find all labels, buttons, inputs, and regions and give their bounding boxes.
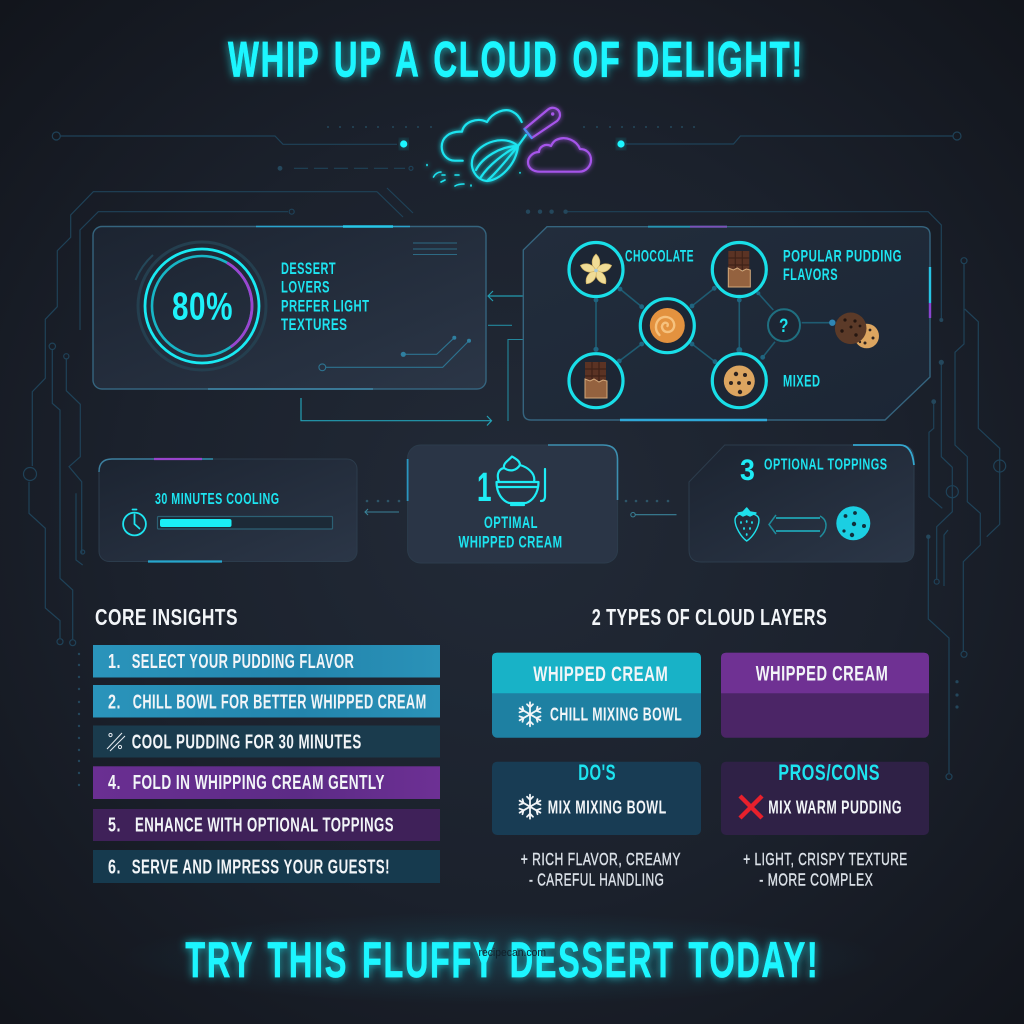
icon: cyan cookie: [836, 506, 870, 540]
step 4: FOLD IN WHIPPING CREAM GENTLY: [133, 772, 385, 794]
decorative dots: [78, 126, 959, 786]
icon: stopwatch: [123, 510, 146, 535]
step 2: 2.: [108, 691, 121, 713]
label: popular pudding flavors: FLAVORS: [783, 266, 838, 284]
step 5: ENHANCE WITH OPTIONAL TOPPINGS: [135, 815, 394, 837]
unknown flavor node: [768, 309, 800, 341]
whisk handle: [524, 108, 560, 138]
label: popular pudding flavors: [783, 248, 902, 284]
description: [281, 259, 370, 334]
list: cream pros and cons: + RICH FLAVOR, CREAMY: [521, 849, 681, 869]
card: whipped cream cyan: [492, 653, 701, 738]
panel: popular pudding flavors: [523, 227, 930, 420]
label: OPTIMAL: [484, 514, 538, 532]
progress ring: [136, 242, 266, 370]
swirl node centre: [640, 299, 694, 353]
circuit traces: left: [24, 132, 413, 646]
chocolate node top: [712, 242, 766, 296]
step 3: COOL PUDDING FOR 30 MINUTES: [132, 731, 362, 753]
panel: 80 percent stat: [93, 226, 486, 389]
cyan cloud: [442, 110, 522, 161]
step 6: 6.: [108, 856, 121, 878]
card: whipped cream cyan: WHIPPED CREAM: [533, 663, 668, 686]
icon: exchange arrows: [769, 515, 826, 537]
card: pros and cons: PROS/CONS: [778, 760, 880, 785]
description: DESSERT: [281, 259, 336, 278]
icon: whipped cream bowl: [496, 456, 545, 505]
label: mixed: MIXED: [783, 373, 820, 391]
icon: snowflake: [520, 795, 540, 819]
card: do's: MIX MIXING BOWL: [548, 797, 667, 817]
unknown flavor node: ?: [779, 316, 789, 337]
label: [458, 514, 562, 552]
step 1: [93, 645, 440, 678]
glowing node left: [400, 140, 407, 148]
arrow and dots: cream to toppings: [625, 500, 676, 517]
list: core insights: [93, 645, 440, 883]
crumbs: [427, 164, 520, 186]
arrow: between top panels: [488, 291, 562, 301]
panel: cooling time: [99, 459, 357, 562]
heading: cloud layers: 2 TYPES OF CLOUD LAYERS: [592, 604, 827, 630]
step 1: 1.: [108, 651, 121, 673]
step 2: [93, 685, 440, 718]
list: cloud pros and cons: + LIGHT, CRISPY TEXTURE: [743, 849, 908, 869]
watermark: recipecan.com: [478, 947, 546, 959]
label: chocolate: CHOCOLATE: [625, 248, 694, 266]
network connectors: [596, 288, 832, 362]
step 2: CHILL BOWL FOR BETTER WHIPPED CREAM: [133, 691, 427, 713]
step 3: [93, 726, 440, 758]
purple cloud: [528, 138, 591, 172]
label: 30 MINUTES COOLING: [155, 491, 280, 508]
step 5: [93, 809, 440, 841]
list: cloud pros and cons: [743, 849, 908, 889]
card: pros and cons: [721, 760, 929, 835]
cookie node: [712, 354, 766, 408]
icon: strawberry: [735, 508, 759, 541]
step 6: SERVE AND IMPRESS YOUR GUESTS!: [132, 856, 390, 878]
label: popular pudding flavors: POPULAR PUDDING: [783, 248, 902, 266]
glowing node right: [617, 140, 625, 148]
network nodes: [593, 286, 836, 364]
step 4: 4.: [108, 772, 121, 794]
arrow and dots: cooling to cream: [365, 500, 400, 515]
step 6: [93, 850, 440, 883]
number: 1: [477, 464, 492, 510]
step 4: [93, 766, 440, 799]
whisk head: [472, 135, 526, 181]
footer glow: [120, 912, 880, 1004]
circuit traces: right: [566, 132, 1006, 780]
number: 3: [740, 454, 756, 487]
list: cloud pros and cons: - MORE COMPLEX: [759, 869, 873, 889]
vanilla flower node: [569, 242, 623, 296]
step 1: SELECT YOUR PUDDING FLAVOR: [132, 651, 354, 673]
arrow: panel one to lower row: [301, 398, 492, 426]
description: PREFER LIGHT: [281, 296, 370, 316]
heading: core insights: CORE INSIGHTS: [95, 604, 238, 630]
chocolate node bottom: [569, 354, 623, 408]
icon: whisk and clouds: [427, 108, 591, 186]
card: pros and cons: MIX WARM PUDDING: [768, 797, 902, 817]
icon: red cross: [740, 796, 762, 818]
icon: cookie pair: [835, 312, 879, 348]
icon: snowflake: [520, 702, 540, 726]
panel: optimal whipped cream: [408, 445, 618, 563]
step 5: 5.: [108, 815, 121, 837]
value: 80%: [172, 286, 233, 328]
description: LOVERS: [281, 278, 330, 297]
list: cream pros and cons: - CAREFUL HANDLING: [529, 869, 664, 889]
card: do's: DO'S: [578, 760, 616, 785]
card: do's: [492, 760, 701, 835]
progress bar: [158, 516, 332, 529]
description: TEXTURES: [281, 315, 348, 334]
panel: optional toppings: [689, 445, 914, 562]
list: cream pros and cons: [521, 849, 681, 889]
connector: vertical link: [508, 340, 525, 421]
card: whipped cream purple: WHIPPED CREAM: [756, 662, 888, 685]
connector: short link: [488, 324, 512, 326]
card: whipped cream cyan: CHILL MIXING BOWL: [550, 705, 682, 725]
card: whipped cream purple: [721, 653, 929, 738]
label: WHIPPED CREAM: [458, 534, 562, 552]
heading: OPTIONAL TOPPINGS: [764, 456, 888, 473]
